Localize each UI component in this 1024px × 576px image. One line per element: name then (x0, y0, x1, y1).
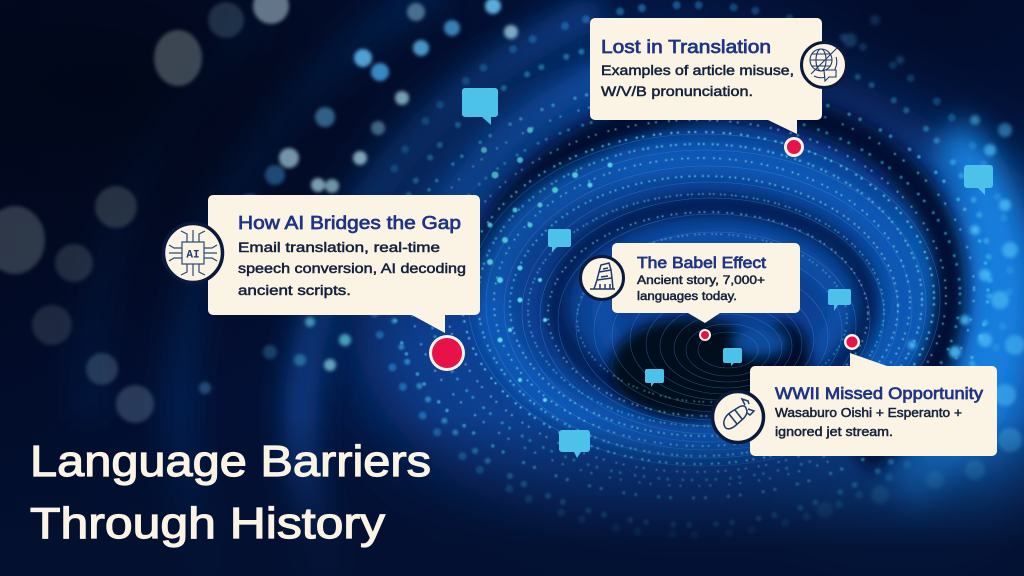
callout: Lost in Translation: Examples of article misuse, (601, 63, 794, 78)
title: Through History (30, 499, 385, 548)
callout: The Babel Effect: Ancient story, 7,000+ (637, 275, 765, 287)
callout: The Babel Effect (580, 243, 800, 323)
callout: How AI Bridges the Gap (164, 195, 480, 333)
callout: WWII Missed Opportunity: ignored jet stream. (775, 425, 893, 439)
cyan particles, left of the swirl (467, 127, 612, 402)
fine concentric lines (468, 134, 940, 466)
bright outer particles (370, 5, 1010, 535)
callout: WWII Missed Opportunity (712, 353, 997, 456)
title (30, 437, 431, 548)
callout: WWII Missed Opportunity: Wasaburo Oishi + Esperanto + (775, 406, 962, 420)
callout: The Babel Effect: languages today. (637, 291, 737, 303)
bokeh lights (0, 0, 518, 423)
chat bubble icons (462, 88, 993, 458)
icon: tower of Babel (580, 256, 624, 300)
marker: How AI Bridges the Gap (429, 335, 465, 371)
callout: How AI Bridges the Gap: How AI Bridges the Gap (238, 212, 461, 233)
callout: Lost in Translation: Lost in Translation (601, 37, 771, 57)
icon: bomb (712, 392, 764, 442)
dotted rings (392, 82, 988, 498)
callout: How AI Bridges the Gap: ancient scripts. (238, 283, 351, 298)
callout: The Babel Effect: The Babel Effect (637, 255, 767, 272)
marker: WWII Missed Opportunity (844, 334, 860, 350)
callout: Lost in Translation (590, 18, 846, 134)
callout: WWII Missed Opportunity: WWII Missed Opportunity (775, 385, 984, 403)
blurred bright particles, right side (817, 15, 1024, 518)
callout: How AI Bridges the Gap: speech conversion, AI decoding (238, 261, 466, 276)
icon: AI chip: AI (186, 250, 200, 262)
icon: AI chip (164, 224, 222, 282)
callout: Lost in Translation: W/V/B pronunciation. (601, 84, 753, 99)
marker: Lost in Translation (784, 137, 804, 157)
icon: globe with speech bubble (802, 42, 846, 88)
title: Language Barriers (30, 437, 431, 486)
marker: The Babel Effect (699, 329, 711, 341)
callout: How AI Bridges the Gap: Email translation, real-time (238, 240, 440, 255)
